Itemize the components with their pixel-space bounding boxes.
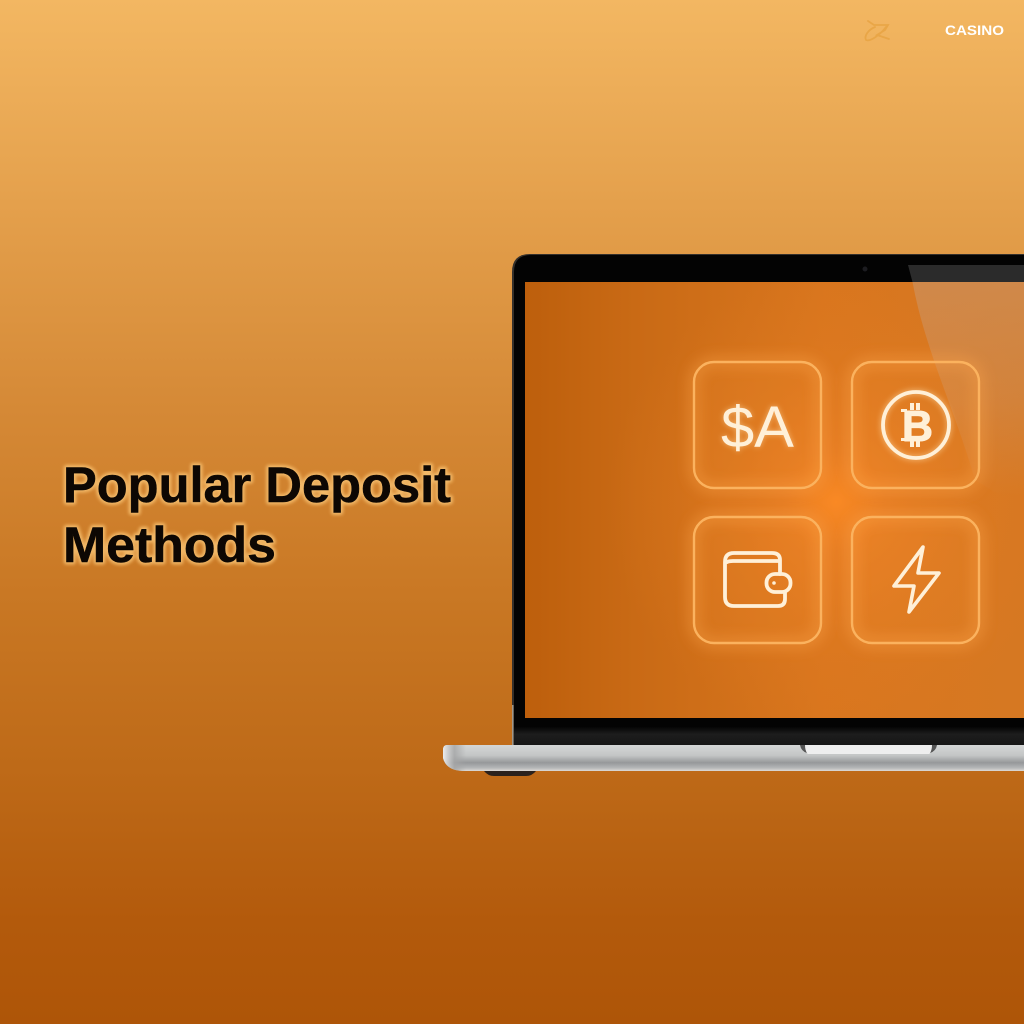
- icon: dollar A: $A: [721, 395, 794, 460]
- icon: wallet: [725, 553, 790, 606]
- icon: bitcoin: B: [902, 402, 933, 451]
- lid chin: [514, 727, 1024, 745]
- laptop foot: [484, 771, 536, 776]
- brand label: CASINO: CASINO: [945, 22, 1004, 38]
- panel: bitcoin card: [852, 362, 979, 488]
- laptop base: [443, 745, 1024, 776]
- laptop lid and bezel: [512, 254, 1024, 746]
- panel: lightning card: [852, 517, 979, 643]
- title: Methods: [63, 517, 276, 573]
- glass reflection: [908, 265, 1024, 510]
- base notch: [800, 745, 937, 754]
- icon: lightning bolt: [894, 547, 939, 612]
- panel: wallet card: [694, 517, 821, 643]
- title: Popular Deposit: [63, 457, 451, 513]
- title: Popular Deposit: [63, 457, 451, 513]
- title: Methods: [63, 517, 276, 573]
- panel: cash card: [694, 362, 821, 488]
- webcam: [862, 266, 868, 272]
- icon: dollar A: $A: [721, 395, 794, 460]
- title: [63, 457, 451, 573]
- laptop: [443, 254, 1024, 776]
- logo mark: [865, 21, 889, 40]
- laptop screen: [525, 282, 1024, 718]
